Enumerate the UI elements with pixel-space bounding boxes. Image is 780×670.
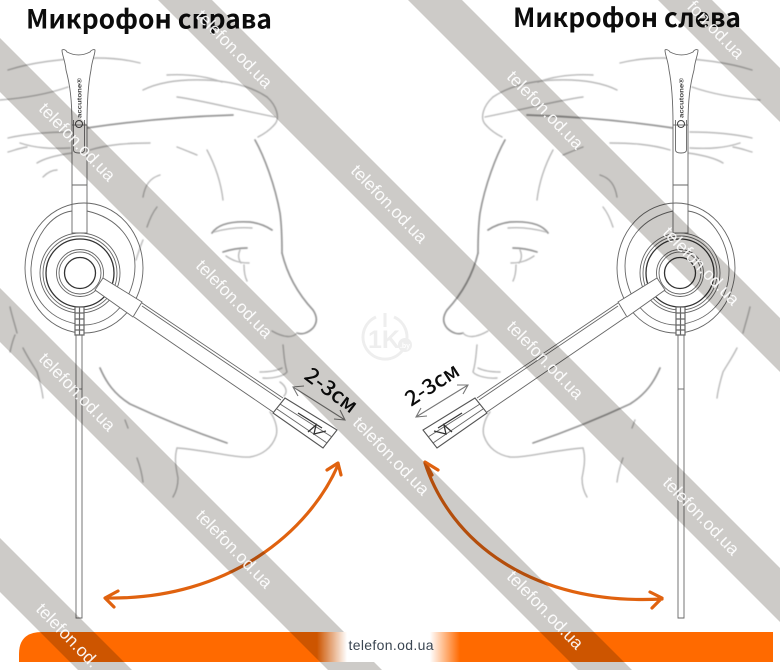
watermark labels: telefon.od.ua bbox=[192, 505, 277, 592]
footer text: telefon.od.ua bbox=[348, 637, 434, 653]
headset brand marks: accutone® bbox=[678, 78, 686, 118]
footer centre glow bbox=[317, 632, 460, 662]
watermark labels: telefon.od.ua bbox=[347, 160, 432, 247]
left headset bbox=[25, 50, 337, 618]
boom arm bbox=[95, 278, 142, 317]
faint centre logo bbox=[363, 313, 412, 359]
watermark labels: telefon.od.ua bbox=[192, 5, 277, 92]
strain relief bbox=[75, 307, 84, 335]
watermark labels: telefon.od.ua bbox=[659, 472, 744, 559]
heading: microphone right: Микрофон справа bbox=[26, 0, 272, 36]
ear cushion bbox=[25, 203, 143, 333]
headset brand marks: accutone® bbox=[76, 78, 84, 118]
right headset bbox=[423, 50, 735, 618]
left face sketch bbox=[0, 58, 316, 497]
cable bbox=[76, 335, 82, 618]
watermark labels: telefon.od.ua bbox=[192, 255, 277, 342]
left distance label: 2-3см bbox=[299, 360, 365, 420]
headset brand marks bbox=[76, 78, 686, 128]
right distance label: 2-3см bbox=[398, 355, 465, 413]
watermark labels: telefon.od.ua bbox=[349, 412, 434, 499]
left orange double arrow bbox=[105, 463, 341, 607]
right distance arrow bbox=[416, 385, 468, 417]
watermark labels: telefon.od.ua bbox=[35, 348, 120, 435]
faint centre logo: 1K bbox=[368, 326, 400, 354]
footer bar bbox=[19, 632, 773, 662]
watermark labels: telefon.od.ua bbox=[503, 316, 588, 403]
watermark labels: telefon.od. bbox=[32, 599, 103, 670]
left distance arrow bbox=[293, 386, 345, 420]
right face sketch bbox=[444, 58, 760, 497]
watermark labels: telefon.od.ua bbox=[503, 566, 588, 653]
headband bbox=[62, 50, 95, 233]
speaker rings bbox=[40, 233, 120, 313]
faint centre logo: .by bbox=[400, 343, 410, 350]
watermark labels: telefon.od.ua bbox=[659, 222, 744, 309]
watermark labels: telefon.od.ua bbox=[503, 66, 588, 153]
right orange double arrow bbox=[425, 462, 662, 608]
microphone capsule bbox=[273, 398, 337, 448]
watermark labels: telefon.od.ua bbox=[35, 98, 120, 185]
